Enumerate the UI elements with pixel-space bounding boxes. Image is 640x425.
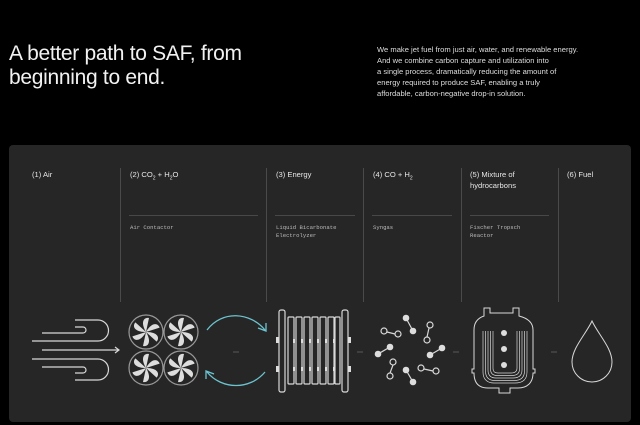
sublabel: air contactor: Air Contactor: [130, 224, 174, 231]
title: beginning to end.: [9, 66, 165, 89]
label: hydrocarbons: [470, 170, 516, 190]
icon: reactor: [472, 308, 535, 393]
title: A better path to SAF, from: [9, 42, 242, 65]
intro text: a single process, dramatically reducing the amount of: [377, 67, 556, 76]
sublabel: syngas: Syngas: [373, 224, 393, 231]
label: air: (1) Air: [32, 170, 52, 179]
label: fuel: (6) Fuel: [567, 170, 593, 179]
panel: process: [9, 145, 631, 422]
sublabel: reactor: [470, 224, 520, 239]
icon: fuel drop: [572, 321, 612, 382]
label: hydrocarbons: hydrocarbons: [470, 181, 516, 190]
label: energy: (3) Energy: [276, 170, 311, 179]
title: [9, 42, 242, 89]
label: hydrocarbons: (5) Mixture of: [470, 170, 515, 179]
sublabel: reactor: Reactor: [470, 232, 494, 239]
sublabel: electrolyser: Electrolyzer: [276, 232, 316, 239]
arrows: [233, 351, 557, 353]
intro text: energy required to produce SAF, enabling a truly: [377, 78, 540, 87]
intro text: affordable, carbon-negative drop-in solution.: [377, 89, 525, 98]
label: co h2: (4) CO + H2: [373, 170, 413, 182]
sublabel: electrolyser: [276, 224, 336, 239]
icon: fans: [129, 315, 198, 385]
label: co2 h2o: (2) CO2 + H2O: [130, 170, 178, 182]
sublabel: reactor: Fischer Tropsch: [470, 224, 520, 231]
intro text: [377, 45, 578, 98]
icon: air: [32, 320, 119, 380]
intro text: We make jet fuel from just air, water, and renewable energy.: [377, 45, 578, 54]
icon: molecules: [375, 315, 445, 385]
icon: cycle arrows: [206, 316, 266, 386]
sublabel: electrolyser: Liquid Bicarbonate: [276, 224, 336, 231]
intro text: And we combine carbon capture and utilization into: [377, 56, 549, 65]
icon: electrolyser: [276, 310, 351, 392]
